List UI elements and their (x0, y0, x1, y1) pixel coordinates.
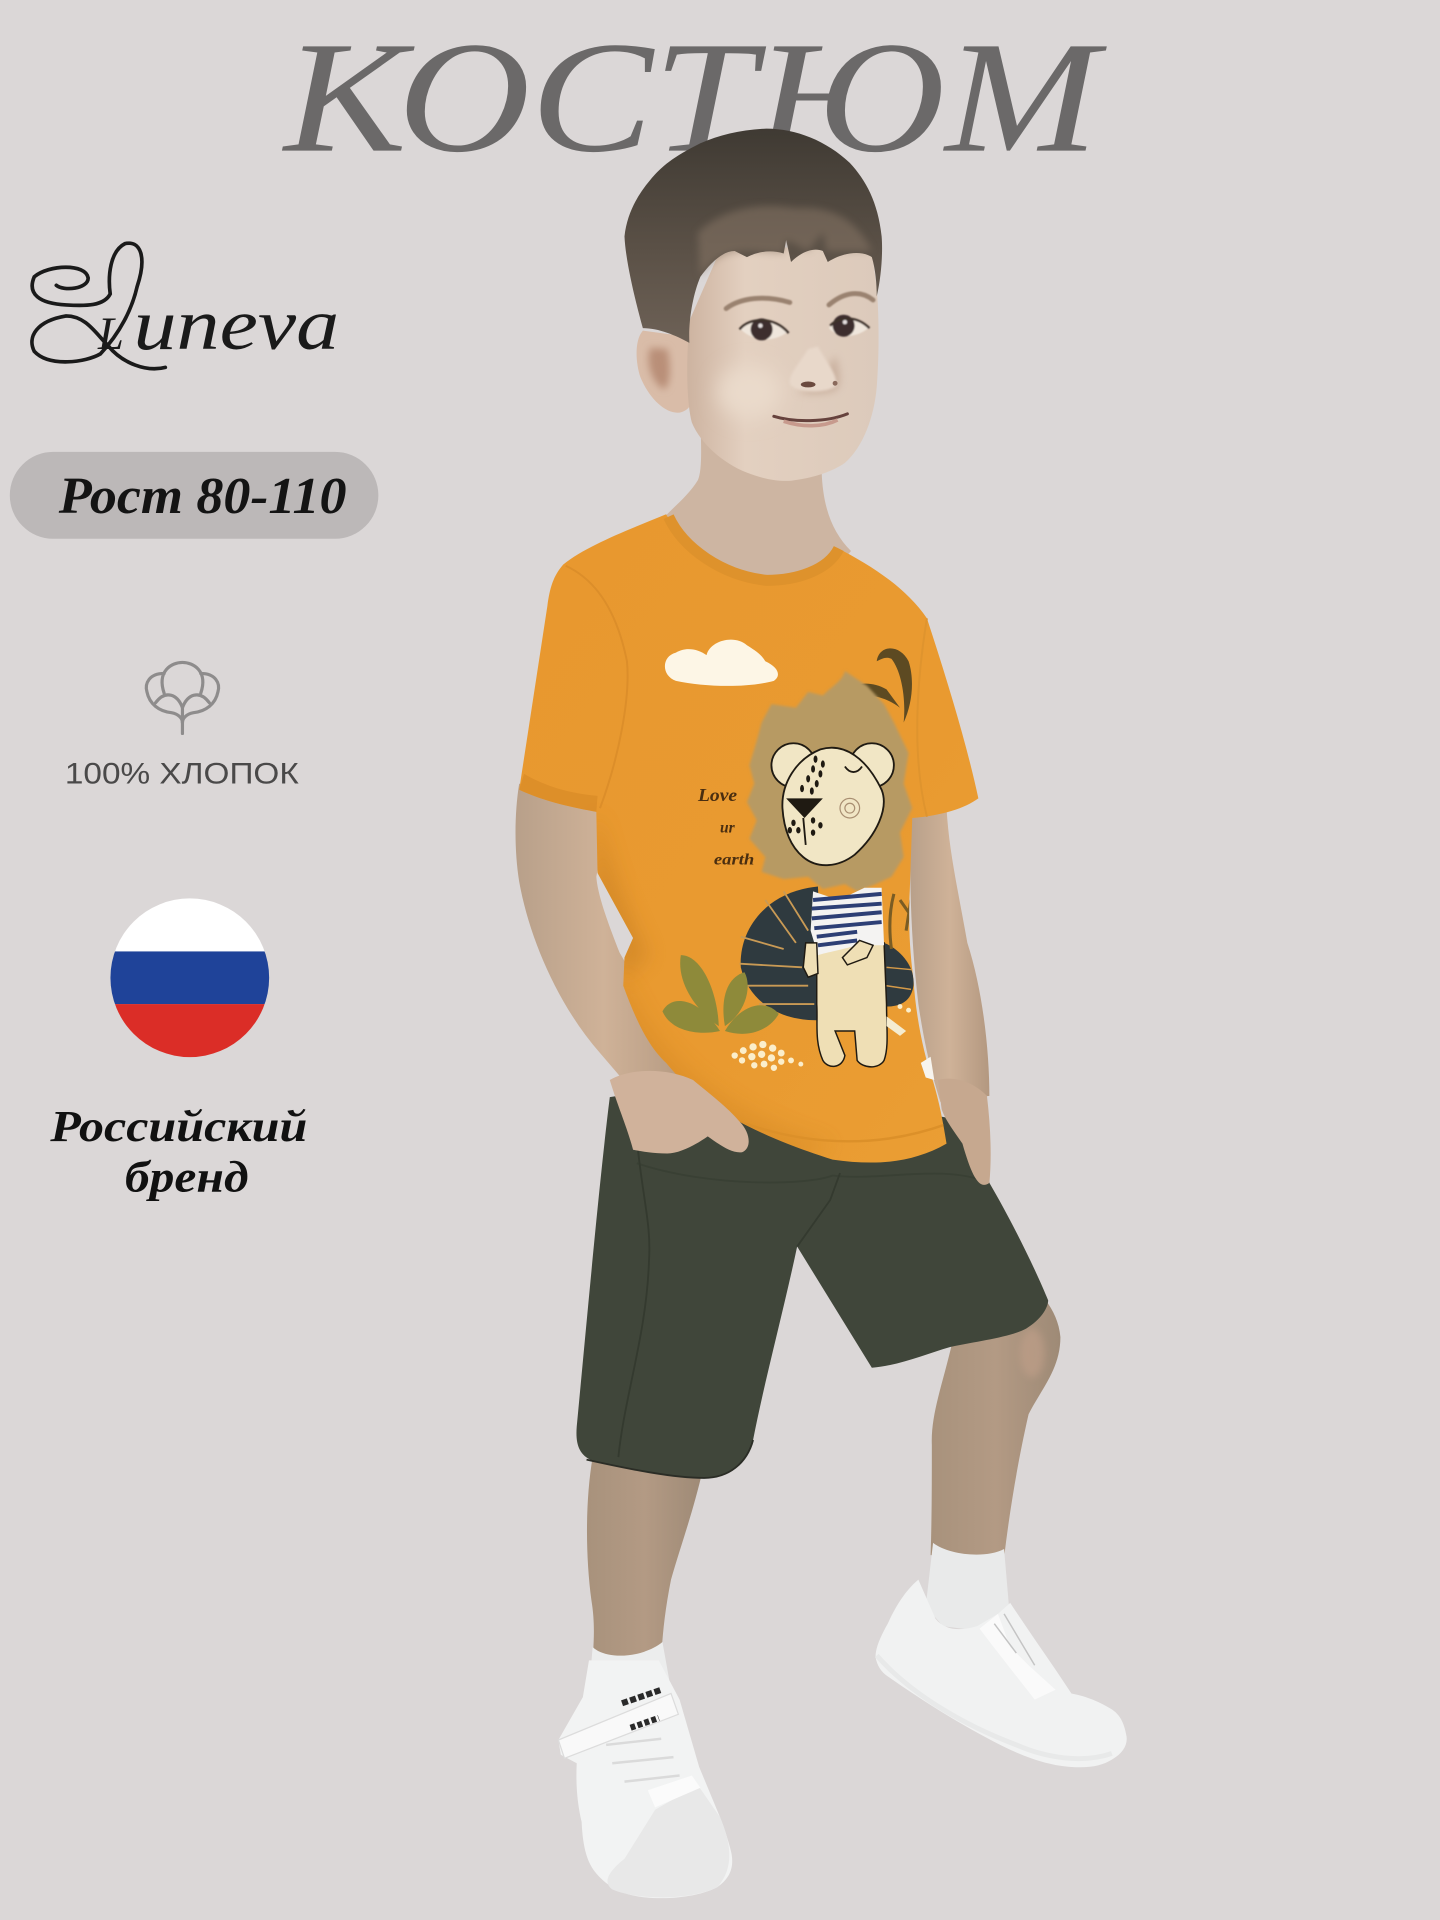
icon: cotton (146, 662, 219, 733)
right shoe (876, 1580, 1127, 1767)
print: dots (732, 1004, 911, 1071)
right leg (931, 1300, 1060, 1558)
left leg (587, 1457, 703, 1659)
height pill (10, 452, 378, 539)
logo: Luneva: L (97, 309, 124, 360)
left sock (588, 1642, 671, 1704)
brand caption: Российский (49, 1102, 307, 1151)
brand caption: бренд (125, 1152, 249, 1201)
infographic canvas (10, 45, 1127, 1898)
hair (624, 129, 882, 343)
t-shirt print (662, 640, 914, 1071)
print: face markings (786, 756, 825, 845)
print: right leaf (884, 891, 914, 1007)
t-shirt (519, 514, 978, 1163)
print: mane (747, 671, 912, 891)
eyes (740, 315, 869, 340)
cotton label: 100% ХЛОПОК (65, 758, 299, 791)
print: tail (877, 648, 912, 722)
collar (669, 517, 839, 580)
hair fringe highlight (698, 206, 872, 277)
sleeve seam (566, 566, 628, 808)
neck (661, 422, 851, 600)
eyebrows (726, 294, 873, 309)
print: lion face (782, 748, 884, 865)
print: lion body (817, 943, 887, 1067)
white patch at shirt edge (921, 1057, 934, 1080)
print: lettering: ur (720, 820, 735, 837)
cheek highlight (718, 365, 781, 419)
left arm (516, 784, 692, 1096)
logo: Luneva: uneva (133, 284, 339, 365)
mouth (774, 414, 847, 426)
nose (790, 347, 840, 394)
print: closed eye (845, 767, 862, 772)
right sock (926, 1543, 1009, 1631)
brand caption (49, 1102, 307, 1201)
print: lettering: earth (714, 851, 754, 868)
icon: russian flag (108, 896, 272, 1059)
print: dark monstera leaf (740, 887, 823, 1020)
print: green plant (662, 955, 779, 1034)
title: КОСТЮМ (282, 10, 1107, 186)
shorts (576, 1078, 1048, 1478)
right hand (938, 1079, 991, 1185)
print: cheek swirl (840, 798, 860, 818)
print: lion paws (803, 940, 906, 1036)
left shoe (558, 1660, 732, 1898)
left hand (610, 1071, 749, 1153)
print: lettering: Love (697, 785, 737, 805)
face (687, 245, 879, 481)
right arm (910, 808, 989, 1102)
boy figure (516, 129, 1127, 1898)
height pill: Рост 80-110 (58, 468, 347, 525)
print: lion ears (771, 743, 894, 787)
knee shading (1020, 1329, 1044, 1378)
print: cloud (665, 640, 778, 686)
print: striped tee (811, 888, 884, 955)
logo: Luneva (32, 243, 339, 369)
ear (637, 331, 692, 413)
print: lettering (698, 789, 754, 864)
